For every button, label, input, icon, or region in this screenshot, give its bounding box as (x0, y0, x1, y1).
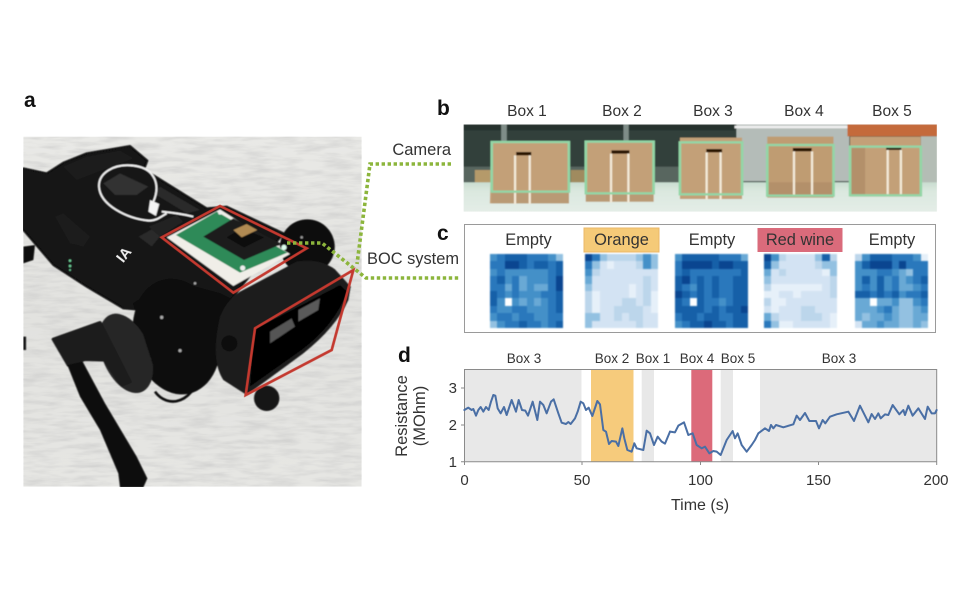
heatmap labels: Empty (869, 231, 916, 249)
connector: camera (357, 164, 451, 264)
box labels: Box 4 (784, 103, 824, 120)
x tick labels (460, 472, 949, 489)
heatmap labels: Orange (594, 231, 649, 249)
y tick labels: 2 (449, 417, 457, 434)
red outline: camera (246, 270, 353, 395)
label d: d (398, 344, 411, 367)
box 3 (680, 138, 742, 199)
resistance trace (464, 395, 937, 455)
heatmap labels (505, 231, 916, 249)
x tick labels: 50 (574, 472, 590, 489)
x tick labels: 0 (460, 472, 469, 489)
segment labels: Box 1 (636, 351, 670, 366)
robot body (23, 146, 351, 487)
red wine label background (758, 228, 842, 252)
x tick labels: 100 (688, 472, 713, 489)
photo floor (23, 137, 362, 487)
box 4 (767, 137, 834, 198)
heatmap: empty 2 (674, 253, 750, 330)
panel a: robot photo (23, 137, 362, 487)
figure (23, 96, 948, 514)
x tick labels: 150 (806, 472, 831, 489)
heatmap: red wine (762, 252, 838, 329)
front hip (132, 278, 218, 396)
floor (464, 182, 937, 212)
resistance chart (393, 370, 949, 514)
head (216, 261, 351, 395)
segment labels: Box 2 (595, 351, 629, 366)
background (464, 124, 937, 168)
label b: b (437, 97, 450, 120)
lower leg (67, 362, 147, 487)
foot (254, 386, 279, 411)
segment labels: Box 3 (507, 351, 541, 366)
upper leg (53, 323, 130, 385)
heatmap labels: Empty (505, 231, 553, 249)
y tick labels (449, 380, 457, 471)
y axis unit: (MOhm) (411, 386, 429, 446)
USB cable (99, 165, 193, 221)
box labels: Box 1 (507, 103, 547, 120)
box labels (507, 103, 912, 120)
LEDs (69, 259, 71, 262)
box 1 (490, 142, 569, 203)
y tick labels: 1 (449, 454, 457, 471)
segment labels: Box 3 (822, 351, 856, 366)
segment labels: Box 4 (680, 351, 715, 366)
screws (160, 316, 163, 319)
camera label: Camera (392, 141, 452, 159)
box labels: Box 2 (602, 103, 642, 120)
x axis title: Time (s) (671, 497, 729, 514)
y axis title: Resistance (393, 375, 411, 457)
box labels: Box 3 (693, 103, 733, 120)
table (736, 124, 849, 181)
leg cable (153, 390, 193, 404)
BOC board (167, 209, 290, 286)
heatmap: empty 3 (854, 253, 929, 329)
axes (461, 370, 937, 465)
segment labels: Box 5 (721, 351, 755, 366)
x tick labels: 200 (923, 472, 949, 489)
box 5 (850, 137, 921, 197)
red outline: BOC system (162, 206, 307, 293)
heatmap labels: Empty (689, 231, 736, 249)
y tick labels: 3 (449, 380, 457, 397)
orange label background (584, 228, 659, 252)
IA marking: IA (114, 244, 135, 266)
panel c frame (464, 224, 936, 332)
connector: BOC system (287, 243, 459, 278)
box 2 (586, 142, 654, 202)
segment bands (464, 370, 582, 462)
label c: c (437, 222, 449, 245)
rear hip (280, 219, 335, 274)
main drawing (23, 96, 948, 514)
panel b: camera image (464, 124, 937, 212)
label a: a (24, 89, 36, 112)
detection frames (492, 142, 921, 196)
heatmap: empty 1 (489, 253, 564, 329)
box labels: Box 5 (872, 103, 912, 120)
BOC system label: BOC system (367, 250, 459, 268)
heatmap labels: Red wine (766, 231, 834, 249)
segment labels (507, 351, 856, 366)
heatmap: orange (584, 252, 659, 329)
